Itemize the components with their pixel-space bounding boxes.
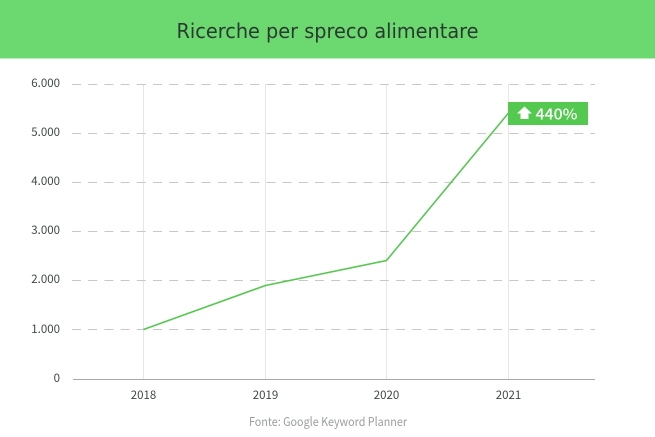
- data line: [144, 113, 508, 330]
- y axis labels: 4.000: [31, 173, 60, 189]
- source note: Fonte: Google Keyword Planner: [249, 413, 407, 430]
- y axis labels: 6.000: [31, 75, 60, 91]
- icon: up arrow: [517, 106, 532, 119]
- callout value: 440%: [536, 104, 578, 124]
- title: Ricerche per spreco alimentare: [176, 19, 478, 43]
- x axis labels: 2021: [496, 387, 521, 403]
- x axis: [73, 378, 595, 380]
- x axis labels: [131, 387, 521, 403]
- line chart: [31, 75, 595, 403]
- y axis labels: [31, 75, 60, 386]
- y axis labels: 5.000: [31, 124, 60, 140]
- vertical grid lines: [144, 84, 508, 379]
- x axis labels: 2019: [253, 387, 278, 403]
- y axis labels: 2.000: [31, 271, 60, 287]
- y axis labels: 0: [54, 370, 60, 386]
- y axis labels: 1.000: [31, 321, 60, 337]
- title banner: [0, 0, 655, 58]
- x axis labels: 2018: [131, 387, 156, 403]
- horizontal grid lines: [72, 84, 595, 330]
- y axis labels: 3.000: [31, 222, 60, 238]
- x axis labels: 2020: [374, 387, 399, 403]
- callout: 440%: [508, 102, 588, 125]
